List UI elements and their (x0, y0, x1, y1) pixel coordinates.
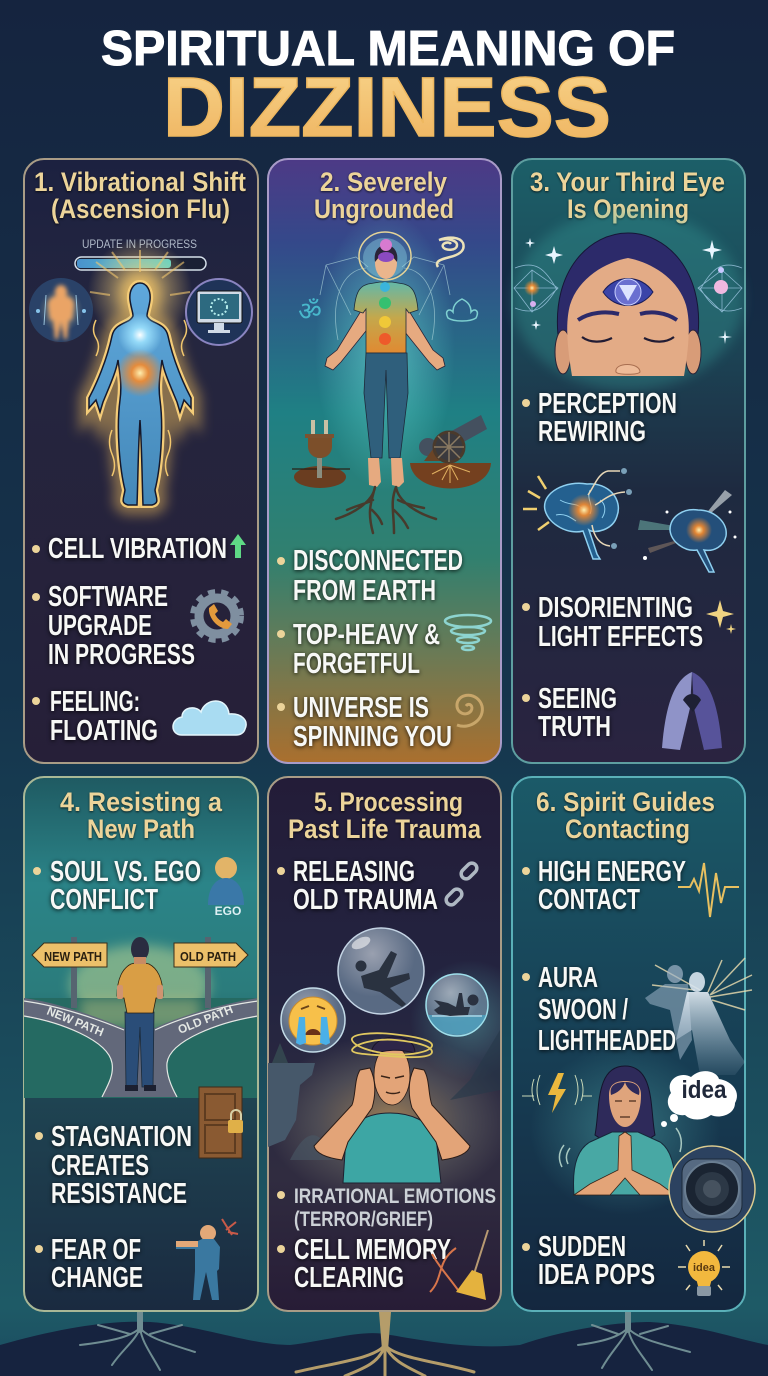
icon: person in aura (29, 278, 93, 342)
bullet: software upgrade: SOFTWARE (48, 581, 168, 613)
bullet: disconnected (277, 545, 463, 607)
praying woman (559, 1066, 681, 1195)
bullet: irrational emotions: IRRATIONAL EMOTIONS (294, 1185, 496, 1208)
scene glow and cliff (268, 968, 500, 1196)
bullet: cell memory (277, 1234, 451, 1294)
glowing body figure (88, 238, 192, 505)
sacred geometry sparkles (513, 210, 743, 390)
bullet: disorienting: LIGHT EFFECTS (538, 621, 703, 653)
heading 3: Is Opening (567, 194, 689, 224)
sign: new path (32, 937, 107, 1008)
heading 4: 4. Resisting a (60, 787, 223, 817)
heading 2: 2. Severely (320, 167, 447, 197)
tree roots under feet (336, 487, 436, 533)
bullet: universe spinning (277, 692, 452, 753)
title: DIZZINESS (163, 60, 611, 154)
update label: UPDATE IN PROGRESS (82, 237, 197, 251)
bullet: disconnected: DISCONNECTED (293, 545, 463, 577)
icon: gear and wrench (193, 592, 241, 640)
bullet: cell memory: CLEARING (294, 1262, 404, 1294)
bullet: cell vibration: CELL VIBRATION (48, 533, 227, 565)
bullet: seeing truth: SEEING (538, 683, 617, 715)
bullet: seeing truth: TRUTH (538, 711, 611, 743)
heading 5 (288, 787, 482, 844)
icon: spiral (457, 695, 482, 726)
bullet: universe spinning: SPINNING YOU (293, 721, 452, 753)
road label: old path: OLD PATH (176, 1002, 235, 1037)
bullet: soul vs ego (33, 856, 201, 916)
bullet: stagnation: STAGNATION (51, 1121, 192, 1153)
heading 1 (34, 167, 246, 224)
icon: broken chain (444, 861, 479, 907)
bullet: top-heavy: TOP-HEAVY & (293, 619, 440, 651)
progress bar (75, 257, 206, 270)
bullet: high energy: HIGH ENERGY (538, 856, 686, 888)
panel 5: past life trauma (267, 776, 502, 1312)
icon: cloud (173, 701, 246, 735)
bubble: crying face (281, 988, 345, 1052)
bullet: seeing truth (522, 683, 617, 743)
bullet: aura swoon: LIGHTHEADED (538, 1025, 676, 1057)
figure with chakras (315, 210, 455, 490)
bullet: irrational emotions (277, 1185, 496, 1231)
road label: new path: NEW PATH (45, 1004, 106, 1039)
panel 3: third eye (512, 159, 745, 763)
heading 2 (314, 167, 454, 224)
icon: om symbol: ॐ (298, 296, 322, 326)
icon: ego figure: EGO (215, 904, 241, 918)
icon: ego figure (208, 857, 244, 918)
panel 1: vibrational shift (24, 159, 258, 763)
heading 2: Ungrounded (314, 194, 454, 224)
bullet: high energy: CONTACT (538, 884, 640, 916)
bullet: fear of change: FEAR OF (51, 1234, 141, 1266)
icon: galaxy spiral (437, 238, 464, 267)
title (101, 22, 675, 154)
bullet: aura swoon: SWOON / (538, 994, 628, 1026)
bullet: perception: REWIRING (538, 416, 646, 448)
crossroads scene (24, 937, 258, 1098)
bullet: sudden idea pops: SUDDEN (538, 1231, 626, 1263)
icon: angelic spirits (645, 958, 752, 1075)
bullet: aura swoon: AURA (538, 962, 598, 994)
bubble: falling figure (338, 928, 424, 1014)
heading 3 (530, 167, 725, 224)
bullet: software upgrade: UPGRADE (48, 610, 152, 642)
heading 1: 1. Vibrational Shift (34, 167, 246, 197)
bullet: software upgrade: IN PROGRESS (48, 639, 195, 671)
bullet: perception: PERCEPTION (538, 388, 677, 420)
person from behind (117, 937, 163, 1091)
bullet: top-heavy (277, 619, 440, 680)
heading 6: Contacting (565, 814, 690, 844)
glow behind woman (530, 1045, 720, 1215)
bullet: stagnation: RESISTANCE (51, 1178, 187, 1210)
ground hills with roots (0, 1312, 768, 1376)
face with third eye (555, 233, 701, 376)
bullet: sudden idea pops: IDEA POPS (538, 1259, 655, 1291)
panel 2: severely ungrounded (268, 159, 501, 763)
sign: new path: NEW PATH (44, 949, 102, 964)
bullet: stagnation: CREATES (51, 1150, 149, 1182)
heading 4: New Path (87, 814, 195, 844)
heading 5: Past Life Trauma (288, 814, 482, 844)
icon: left brain (523, 468, 632, 559)
sign: old path: OLD PATH (180, 949, 236, 964)
icon: sparkles (706, 600, 736, 634)
bullet: universe spinning: UNIVERSE IS (293, 692, 429, 724)
idea thought bubble: idea (682, 1076, 727, 1104)
bullet: disorienting: DISORIENTING (538, 592, 693, 624)
heading 4 (60, 787, 223, 844)
bullet: cell vibration (32, 533, 227, 565)
heading 6 (536, 787, 715, 844)
icon: energy waveform (678, 863, 739, 917)
bullet: disconnected: FROM EARTH (293, 575, 436, 607)
bullet: feeling floating: FLOATING (50, 715, 158, 747)
heading 3: 3. Your Third Eye (530, 167, 725, 197)
dizzy man holding head (314, 1033, 470, 1183)
icon: right brain with light rays (638, 490, 736, 572)
icon: idea lightbulb (678, 1240, 730, 1296)
icon: locked door (199, 1087, 243, 1158)
bullet: fear of change (35, 1234, 143, 1294)
sign: old path (174, 937, 248, 1008)
bullet: releasing: RELEASING (293, 856, 415, 888)
bullet: fear of change: CHANGE (51, 1262, 143, 1294)
bullet: high energy (522, 856, 686, 916)
bubble: drowning figure (426, 974, 488, 1036)
bullet: cell memory: CELL MEMORY (294, 1234, 451, 1266)
icon: idea lightbulb: idea (693, 1262, 716, 1274)
title: SPIRITUAL MEANING OF (101, 22, 675, 76)
bullet: perception (522, 388, 677, 448)
icon: tornado (445, 615, 491, 650)
icon: dna and broom (430, 1230, 488, 1300)
heading 5: 5. Processing (314, 787, 463, 817)
icon: green up arrow (230, 534, 246, 558)
icon: computer update (186, 279, 252, 345)
bullet: sudden idea pops (522, 1231, 655, 1291)
bullet: irrational emotions: (TERROR/GRIEF) (294, 1208, 433, 1231)
icon: lightning with waves (522, 1073, 592, 1113)
panel 4: resisting a new path (24, 777, 258, 1311)
heading 1: (Ascension Flu) (51, 194, 230, 224)
icon: lifted veil (662, 672, 722, 750)
icon: cannon on ground (410, 415, 491, 488)
star sparkles (525, 238, 732, 344)
bullet: feeling floating: FEELING: (50, 686, 140, 718)
bullet: soul vs ego: SOUL VS. EGO (50, 856, 201, 888)
icon: speaker (669, 1146, 755, 1232)
bullet: top-heavy: FORGETFUL (293, 648, 420, 680)
icon: person pushing away (176, 1219, 238, 1300)
bullet: software upgrade (32, 581, 195, 671)
bullet: releasing: OLD TRAUMA (293, 884, 438, 916)
icon: lotus (447, 299, 477, 321)
bullet: disorienting (522, 592, 703, 653)
icon: unplugged plug (292, 420, 350, 488)
bullet: releasing (277, 856, 438, 916)
heading 6: 6. Spirit Guides (536, 787, 715, 817)
panel 6: spirit guides (512, 777, 755, 1311)
idea thought bubble (661, 1071, 737, 1127)
bullet: stagnation (35, 1121, 192, 1210)
bullet: aura swoon (522, 962, 676, 1057)
bullet: feeling floating (32, 686, 158, 747)
bullet: soul vs ego: CONFLICT (50, 884, 158, 916)
